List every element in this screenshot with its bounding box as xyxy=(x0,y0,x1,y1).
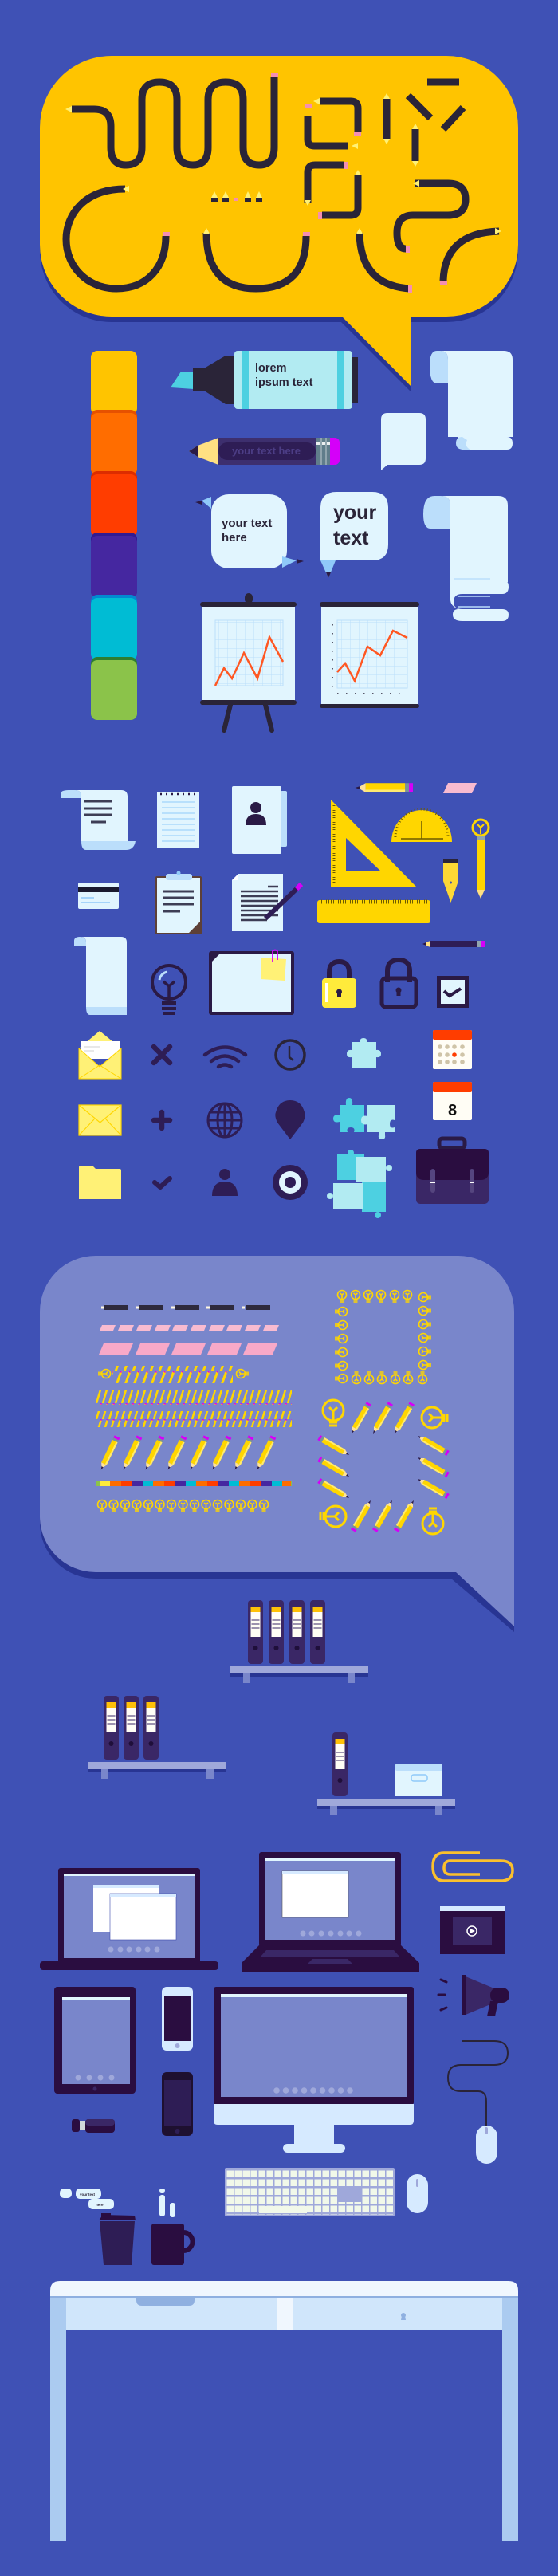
icon: clock xyxy=(276,1040,305,1069)
shelf with three binders xyxy=(88,1696,226,1779)
icon: calendar xyxy=(433,1030,472,1069)
icon: contact book xyxy=(232,786,287,854)
laptop 1 xyxy=(40,1868,218,1970)
icon: document with pencil xyxy=(232,874,301,931)
pencil rows xyxy=(96,1366,292,1427)
icon: calendar 8: 8 xyxy=(448,1102,457,1119)
icon: globe xyxy=(208,1103,242,1137)
shelf with four binders xyxy=(230,1600,368,1683)
bulb row xyxy=(97,1500,268,1512)
small chat bubbles: your text xyxy=(80,2193,96,2196)
icon: envelope closed xyxy=(79,1105,121,1135)
large erasers row xyxy=(99,1343,277,1355)
bubble: your text (big): text xyxy=(333,527,369,549)
icon: calendar 8 xyxy=(433,1082,472,1120)
icon: video player xyxy=(440,1906,505,1954)
big yellow pencils row xyxy=(98,1435,276,1471)
icon: plus xyxy=(154,1112,170,1128)
tiny pencils row xyxy=(211,191,262,202)
icon: map pin xyxy=(275,1100,305,1139)
icon: X xyxy=(154,1047,170,1063)
scroll paper long xyxy=(423,496,509,621)
icon: fountain pen nib xyxy=(443,859,458,903)
dark pencils row xyxy=(101,1305,274,1310)
mouse xyxy=(407,2174,428,2213)
marker with lorem ipsum text: ipsum text xyxy=(255,376,313,389)
icon: small pencil xyxy=(355,783,413,792)
icon: clipboard xyxy=(155,871,202,934)
icon: ring target xyxy=(273,1165,308,1200)
scroll paper top right xyxy=(430,351,513,450)
small speech bubble xyxy=(381,413,426,470)
icon: dark pencil xyxy=(422,941,485,947)
icons row 4: open envelope xyxy=(79,1031,121,1079)
icon: checkbox xyxy=(437,976,469,1008)
phone white xyxy=(162,1987,193,2051)
easel chart xyxy=(200,593,297,730)
coffee cup xyxy=(99,2213,136,2265)
small chat bubbles: here xyxy=(96,2203,104,2207)
keyboard xyxy=(225,2168,395,2216)
icon: eraser xyxy=(443,783,477,793)
bulb frame xyxy=(336,1290,430,1384)
shelf with binder and box xyxy=(317,1732,455,1815)
icon: puzzle group xyxy=(327,1150,392,1218)
icon: usb stick xyxy=(72,2119,115,2133)
laptop 2 xyxy=(242,1852,419,1972)
icon: yellow lock xyxy=(322,962,356,1008)
bubble: your text here (pencil ends): here xyxy=(222,531,247,545)
small chat bubbles xyxy=(60,2189,114,2209)
icon: briefcase xyxy=(416,1139,489,1204)
icon: tablet with sticky note xyxy=(209,950,294,1015)
icon: puzzle pair xyxy=(333,1098,395,1139)
mug with steam xyxy=(151,2189,193,2265)
tablet xyxy=(54,1987,136,2094)
icon: protractor xyxy=(391,809,452,842)
panel: lavender speech bubble with patterns xyxy=(40,1256,514,1632)
marker with lorem ipsum text: lorem xyxy=(255,362,287,375)
icons row 1: scroll document xyxy=(61,790,136,850)
icon: dark lock xyxy=(382,960,416,1007)
icon: set square triangle xyxy=(331,800,417,887)
icon: check xyxy=(155,1178,170,1187)
icon: folder xyxy=(79,1166,121,1199)
phone dark xyxy=(162,2072,193,2136)
icon: bulb pencil xyxy=(473,820,489,899)
desktop monitor xyxy=(214,1987,414,2153)
icon: wifi xyxy=(205,1048,246,1067)
icon: credit card xyxy=(78,883,119,909)
bubble: your text (big) xyxy=(320,492,388,578)
icon: scroll paper xyxy=(74,937,127,1015)
icon: puzzle piece xyxy=(347,1038,381,1068)
icon: notepad xyxy=(157,792,199,848)
marker with lorem ipsum text xyxy=(171,351,358,409)
big pencil and bulb frame xyxy=(317,1400,450,1534)
bubble: your text (big): your xyxy=(333,501,376,524)
icon: paperclip xyxy=(433,1853,513,1881)
color tabs column xyxy=(91,351,137,720)
icon: lightbulb xyxy=(152,966,186,1013)
icon: ruler xyxy=(317,900,430,923)
bubble: your text here (pencil ends): your text xyxy=(222,517,272,530)
icon: megaphone xyxy=(438,1975,509,2016)
bubble: your text here (pencil ends) xyxy=(195,494,304,568)
pencil with your text here xyxy=(189,438,340,465)
pencil art: bent pencils xyxy=(66,77,499,289)
pencil with your text here: your text here xyxy=(232,445,301,457)
chart board xyxy=(320,602,419,708)
desk xyxy=(50,2281,518,2541)
small erasers row xyxy=(100,1325,279,1331)
color stripe xyxy=(96,1481,292,1486)
icon: mouse with cable xyxy=(448,2041,508,2164)
icon: person xyxy=(212,1169,238,1196)
panel: yellow speech bubble xyxy=(40,56,518,392)
